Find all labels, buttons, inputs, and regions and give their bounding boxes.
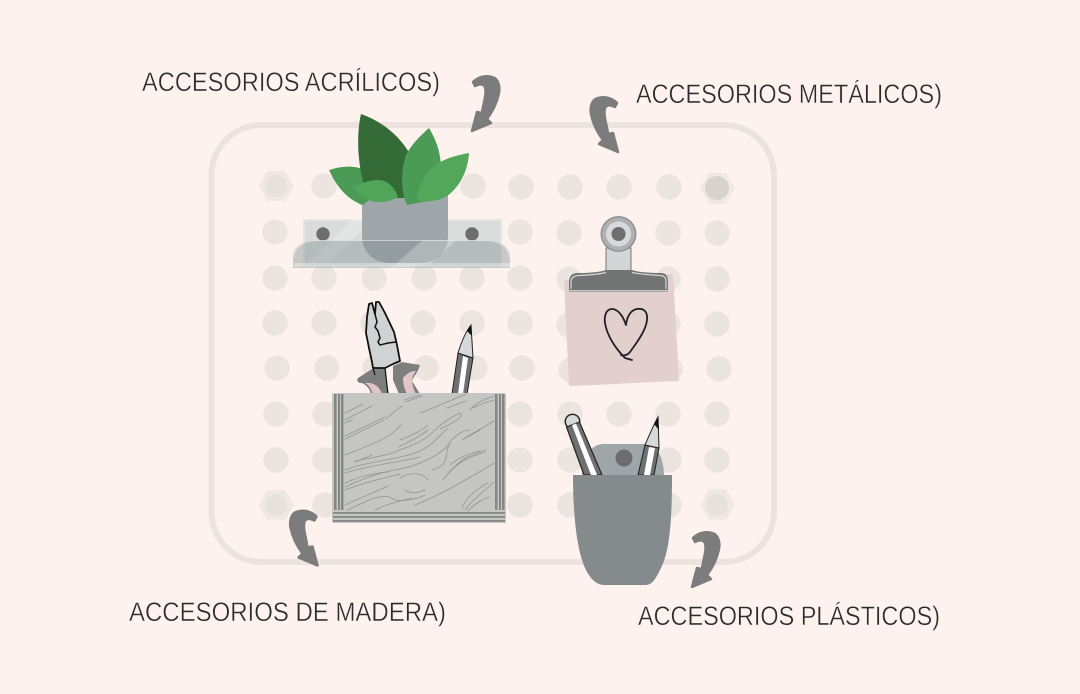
pink note [564,274,679,386]
cup [573,475,672,585]
dark leaf [358,114,412,198]
plant pot [362,190,448,263]
pegboard [212,125,774,562]
clip neck [606,248,631,272]
label: acrylic accessories: ACCESORIOS ACRÍLICOS) [142,67,440,97]
label: metal accessories: ACCESORIOS METÁLICOS) [636,79,942,109]
mount screw [616,450,632,466]
shelf front lip [293,240,510,268]
clip ring [600,216,636,252]
pliers [357,302,420,394]
hex screws [259,171,735,520]
right leaf [417,153,469,201]
wooden holder with pliers and pencil [332,302,506,523]
plastic cup with pencils [565,414,672,585]
arrow: metallic [591,97,618,152]
wood grain [345,394,494,511]
heart doodle [605,309,647,360]
small centre leaf [353,180,398,202]
shelf back panel [303,219,502,267]
cup mount [582,444,664,476]
arrow: acrylic [472,76,499,131]
left pencil [565,414,602,475]
right pencil [638,417,659,475]
label: plastic accessories: ACCESORIOS PLÁSTICOS) [638,601,940,631]
wood block [332,393,506,523]
metal clip with pink note [564,216,679,386]
left leaf [329,167,374,205]
shelf screws [316,227,479,241]
clip body [569,270,668,292]
label: wood accessories: ACCESORIOS DE MADERA) [129,597,446,627]
pencil [452,325,473,394]
acrylic shelf with plant [293,114,510,268]
arrow: wood [290,511,318,566]
arrow: plastic [692,532,719,587]
middle leaf [402,128,441,205]
